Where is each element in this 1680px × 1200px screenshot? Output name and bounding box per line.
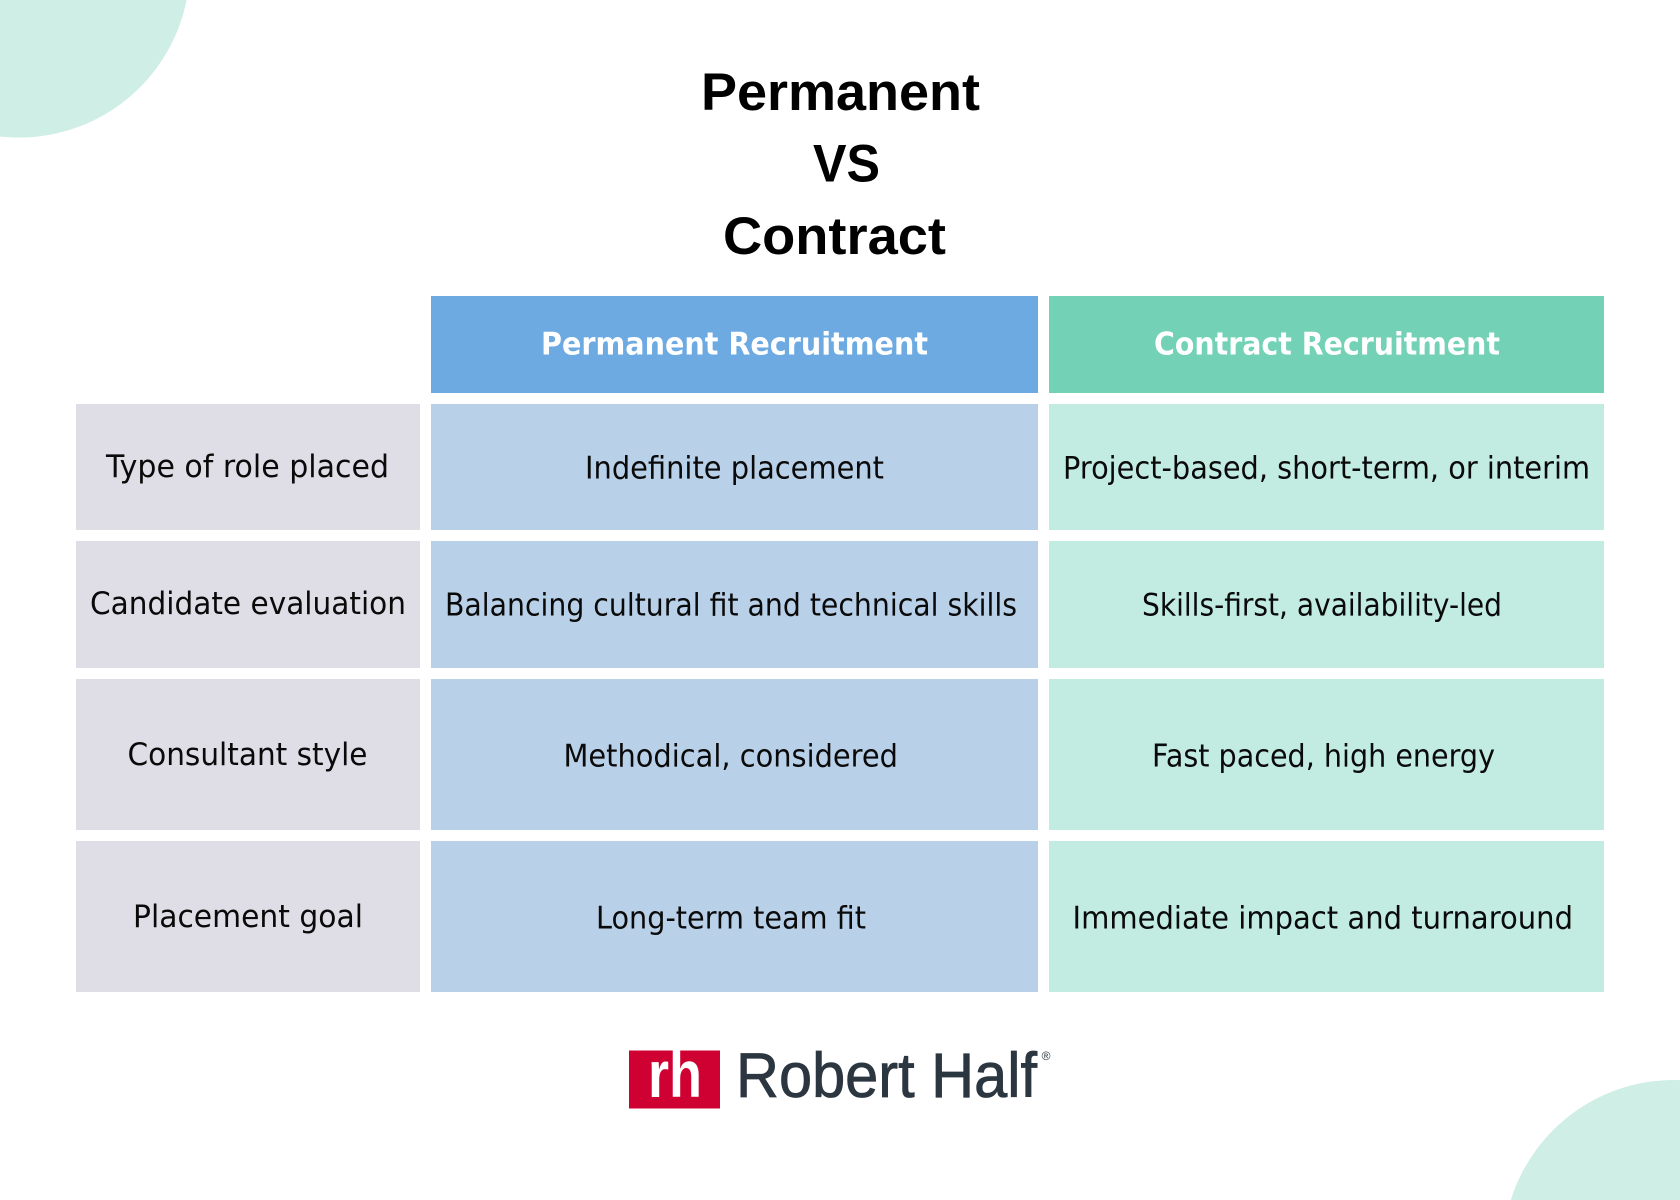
comparison table (76, 296, 1604, 992)
row label: type of role placed: Type of role placed (105, 449, 389, 485)
contract cell: fast paced (1049, 679, 1604, 830)
decorative circle: top left (0, 0, 187, 138)
contract cell: skills-first: Skills-first, availability-led (1142, 588, 1502, 624)
header: contract recruitment (1049, 296, 1604, 393)
permanent cell: long-term (431, 841, 1038, 992)
contract cell: fast paced: Fast paced, high energy (1152, 738, 1495, 774)
row label: placement goal: Placement goal (133, 899, 363, 935)
row label: consultant style: Consultant style (128, 737, 368, 773)
header: permanent recruitment (431, 296, 1038, 393)
row label: type of role placed (76, 404, 420, 530)
header: permanent recruitment: Permanent Recruitment (541, 326, 928, 362)
contract cell: immediate impact (1049, 841, 1604, 992)
contract cell: skills-first (1049, 541, 1604, 668)
row label: candidate evaluation (76, 541, 420, 668)
permanent cell: balancing (431, 541, 1038, 668)
registered mark: ® (1042, 1049, 1051, 1063)
permanent cell: methodical (431, 679, 1038, 830)
row label: placement goal (76, 841, 420, 992)
permanent cell: balancing: Balancing cultural fit and technical skills (445, 588, 1017, 624)
title: VS (813, 134, 880, 194)
logo mark: rh (648, 1037, 702, 1111)
title: Contract (723, 207, 946, 266)
title (701, 63, 980, 266)
row label: candidate evaluation: Candidate evaluation (90, 586, 406, 622)
contract cell: project-based: Project-based, short-term, or interim (1063, 450, 1590, 486)
row label: consultant style (76, 679, 420, 830)
permanent cell: long-term: Long-term team fit (596, 900, 866, 936)
logo wordmark: Robert Half (736, 1041, 1037, 1111)
logo: Robert Half (629, 1037, 1051, 1111)
permanent cell: indefinite placement (431, 404, 1038, 530)
contract cell: project-based (1049, 404, 1604, 530)
permanent cell: indefinite placement: Indefinite placement (585, 450, 884, 486)
header: contract recruitment: Contract Recruitment (1154, 326, 1500, 362)
permanent cell: methodical: Methodical, considered (564, 738, 898, 774)
contract cell: immediate impact: Immediate impact and turnaround (1072, 900, 1573, 936)
title: Permanent (701, 63, 980, 122)
decorative circle: bottom right (1511, 1080, 1680, 1200)
